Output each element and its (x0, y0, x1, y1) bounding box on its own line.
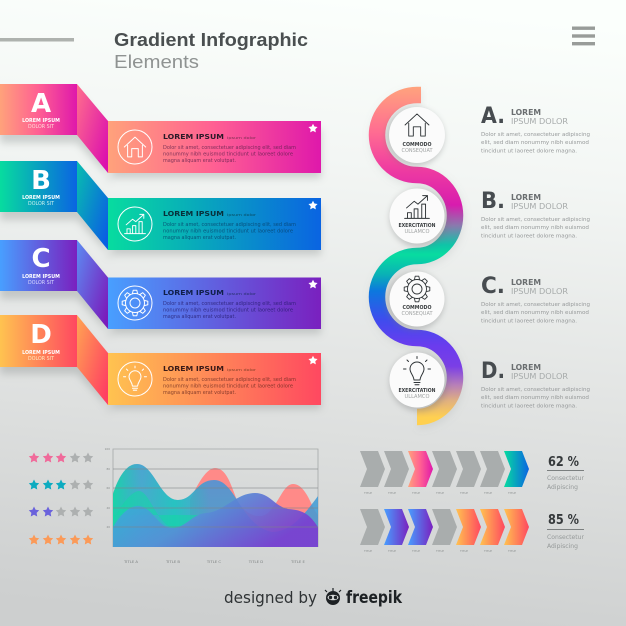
chevron row 1: TITLE (363, 491, 372, 495)
tab A: DOLOR SIT (28, 124, 54, 130)
panel: circle 2 (390, 188, 448, 248)
tab C (0, 240, 77, 291)
banner D: magna aliquam erat volutpat. (163, 390, 236, 396)
panel: circle 3 (386, 272, 444, 330)
text block B: elit, sed diam nonummy nibh euismod (481, 225, 589, 231)
tab A: A (31, 89, 51, 119)
connector D (77, 315, 108, 405)
ribbon shadow (378, 98, 456, 420)
banner B: magna aliquam erat volutpat. (163, 235, 236, 241)
panel: circle 4: EXERCITATION (398, 388, 436, 394)
banner B: ipsum dolor (227, 213, 257, 217)
text block B: LOREM (511, 193, 541, 202)
panel: circle 1: CONSEQUAT (402, 148, 433, 154)
chevron row 2: TITLE (507, 549, 516, 553)
connector A (77, 84, 108, 173)
tab D: DOLOR SIT (28, 356, 54, 362)
text block A: tincidunt ut laoreet dolore magna. (481, 148, 577, 154)
text block A: A. (481, 104, 505, 129)
area chart: 40 (106, 506, 110, 510)
panel: item D (0, 315, 321, 411)
panel: circle 1: COMMODO (402, 142, 432, 148)
panel: circle 1 (386, 107, 445, 166)
text block B (481, 189, 590, 240)
chevron row 2: TITLE (435, 549, 444, 553)
panel: circle 3: COMMODO (402, 305, 432, 311)
chevron row 1: TITLE (387, 491, 396, 495)
text block B: B. (481, 189, 505, 214)
area chart: 80 (106, 467, 110, 471)
banner A: nonummy nibh euismod tincidunt ut laoreet dolore (163, 152, 293, 158)
chevron row 1: TITLE (435, 491, 444, 495)
icon: menu (572, 26, 595, 45)
area chart: TITLE E (290, 559, 306, 564)
chevron row 2: TITLE (459, 549, 468, 553)
connector C (77, 240, 108, 329)
text block C: elit, sed diam nonummy nibh euismod (481, 310, 589, 316)
text block C: LOREM (511, 278, 541, 287)
text block B: Dolor sit amet, consectetuer adipiscing (481, 217, 590, 223)
tab B: DOLOR SIT (28, 201, 54, 207)
stat 62 % (547, 454, 584, 491)
text block C: tincidunt ut laoreet dolore magna. (481, 318, 577, 324)
panel: circle 3: CONSEQUAT (402, 311, 433, 317)
panel: circle 2: EXERCITATION (398, 223, 436, 229)
banner B: LOREM IPSUM (163, 210, 224, 218)
banner D: Dolor sit amet, consectetuer adipiscing elit, sed diam (163, 377, 296, 383)
footer: designed by freepik (224, 588, 403, 607)
text block A: IPSUM DOLOR (511, 117, 568, 126)
text block B: IPSUM DOLOR (511, 202, 568, 211)
text block C: C. (481, 274, 505, 299)
stat 85 % (547, 512, 584, 550)
tab A (0, 84, 77, 135)
chevron row 1: TITLE (483, 491, 492, 495)
icon: star (308, 124, 318, 132)
banner A: ipsum dolor (227, 136, 257, 140)
text block D (481, 359, 590, 410)
banner B: Dolor sit amet, consectetuer adipiscing elit, sed diam (163, 222, 296, 228)
text block A: elit, sed diam nonummy nibh euismod (481, 140, 589, 146)
banner D: nonummy nibh euismod tincidunt ut laoreet dolore (163, 384, 293, 390)
title: Gradient Infographic (114, 30, 308, 50)
banner A: LOREM IPSUM (163, 133, 224, 141)
footer: designed by freepik: freepik (346, 588, 403, 607)
banner D: ipsum dolor (227, 368, 257, 372)
banner C: LOREM IPSUM (163, 289, 224, 297)
chevron row 1: TITLE (411, 491, 420, 495)
area chart: 60 (106, 486, 110, 490)
tab C: DOLOR SIT (28, 280, 54, 286)
icon: bulb (118, 362, 152, 396)
chevron row 1 (360, 451, 529, 495)
icon: gear outline (404, 276, 430, 302)
area chart (105, 447, 318, 564)
chevron row 1: TITLE (459, 491, 468, 495)
star ratings (29, 452, 93, 544)
tab C: C (31, 244, 51, 274)
panel: item A (0, 84, 321, 180)
stat 85 %: 85 % (548, 512, 579, 528)
text block A: LOREM (511, 108, 541, 117)
text block D: LOREM (511, 363, 541, 372)
banner B: nonummy nibh euismod tincidunt ut laoreet dolore (163, 228, 293, 234)
panel: item B (0, 161, 321, 257)
text block C: IPSUM DOLOR (511, 287, 568, 296)
text block D: elit, sed diam nonummy nibh euismod (481, 395, 589, 401)
area chart: TITLE B (165, 559, 180, 564)
text block C: Dolor sit amet, consectetuer adipiscing (481, 302, 590, 308)
icon: chart outline (405, 196, 429, 218)
area chart: TITLE A (123, 559, 138, 564)
icon: gear (118, 286, 152, 320)
text block A: Dolor sit amet, consectetuer adipiscing (481, 132, 590, 138)
text block D: D. (481, 359, 505, 384)
tab C: LOREM IPSUM (22, 274, 60, 280)
text block A (481, 104, 590, 154)
chevron row 2: TITLE (483, 549, 492, 553)
icon: chart (118, 207, 152, 241)
area chart: TITLE C (206, 559, 221, 564)
icon: star (308, 201, 318, 209)
chevron row 2: TITLE (387, 549, 396, 553)
icon: house outline (405, 114, 429, 136)
title (114, 30, 308, 72)
icon: house (118, 130, 152, 164)
panel: item C (0, 240, 321, 336)
top left bar (0, 38, 74, 42)
tab A: LOREM IPSUM (22, 118, 60, 124)
tab D (0, 315, 77, 367)
banner C (108, 278, 321, 329)
panel: circle 2: ULLAMCO (404, 229, 430, 235)
banner D: LOREM IPSUM (163, 365, 224, 373)
stat 85 %: Adipiscing (547, 542, 578, 550)
text block B: tincidunt ut laoreet dolore magna. (481, 234, 577, 240)
banner C: magna aliquam erat volutpat. (163, 314, 236, 320)
icon: star (308, 356, 318, 364)
area chart: 20 (106, 525, 110, 529)
footer: designed by freepik: designed by (224, 588, 317, 607)
title: Elements (114, 52, 199, 72)
tab B (0, 161, 77, 212)
tab B: B (31, 166, 51, 196)
stat 62 %: 62 % (548, 454, 579, 470)
banner A (108, 121, 321, 173)
stat 85 %: Consectetur (547, 533, 584, 541)
banner C: Dolor sit amet, consectetuer adipiscing elit, sed diam (163, 301, 296, 307)
area chart: TITLE D (248, 559, 263, 564)
area chart: 100 (105, 447, 110, 451)
text block D: IPSUM DOLOR (511, 372, 568, 381)
icon: star (308, 280, 318, 288)
connector B (77, 161, 108, 250)
chevron row 2 (360, 509, 529, 553)
panel: circle 4 (390, 352, 448, 412)
chevron row 2: TITLE (363, 549, 372, 553)
text block D: tincidunt ut laoreet dolore magna. (481, 404, 577, 410)
icon: bulb outline (404, 356, 430, 385)
banner B (108, 198, 321, 250)
banner C: ipsum dolor (227, 292, 257, 296)
ribbon: S-curve (377, 95, 455, 417)
tab D: LOREM IPSUM (22, 350, 60, 356)
banner A: Dolor sit amet, consectetuer adipiscing elit, sed diam (163, 145, 296, 151)
tab B: LOREM IPSUM (22, 195, 60, 201)
stat 62 %: Consectetur (547, 474, 584, 482)
text block D: Dolor sit amet, consectetuer adipiscing (481, 387, 590, 393)
icon: freepik logo (325, 588, 341, 605)
banner C: nonummy nibh euismod tincidunt ut laoreet dolore (163, 308, 293, 314)
tab D: D (30, 320, 52, 350)
chevron row 2: TITLE (411, 549, 420, 553)
panel: circle 4: ULLAMCO (404, 394, 430, 400)
banner D (108, 353, 321, 405)
stat 62 %: Adipiscing (547, 483, 578, 491)
text block C (481, 274, 590, 324)
chevron row 1: TITLE (507, 491, 516, 495)
banner A: magna aliquam erat volutpat. (163, 158, 236, 164)
